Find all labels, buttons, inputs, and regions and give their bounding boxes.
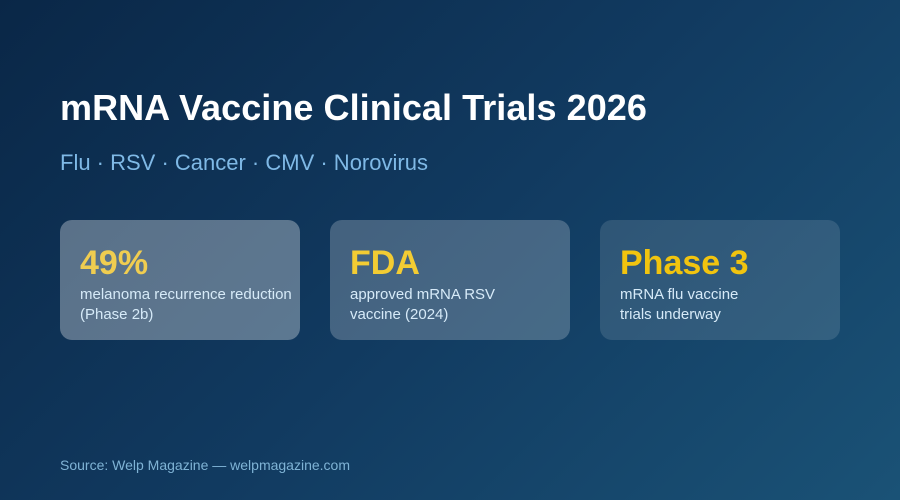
description: flu vaccine: mRNA flu vaccine: [620, 286, 738, 303]
source footer: Source: Welp Magazine — welpmagazine.com: [60, 457, 350, 473]
description: RSV vaccine: [350, 286, 495, 323]
stat: Phase 3: Phase 3: [620, 244, 749, 282]
description: RSV vaccine: vaccine (2024): [350, 306, 448, 323]
stat: FDA: FDA: [350, 244, 420, 282]
description: flu vaccine: [620, 286, 738, 323]
panel: FDA stat card: [330, 220, 570, 340]
stat: 49%: 49%: [80, 244, 148, 282]
description: flu vaccine: trials underway: [620, 306, 721, 323]
title: mRNA Vaccine Clinical Trials 2026: [60, 87, 647, 128]
description: RSV vaccine: approved mRNA RSV: [350, 286, 495, 303]
subtitle: Flu · RSV · Cancer · CMV · Norovirus: [60, 150, 428, 175]
description: melanoma: [80, 286, 292, 323]
description: melanoma: (Phase 2b): [80, 306, 153, 323]
panel: Phase 3 stat card: [600, 220, 840, 340]
description: melanoma: melanoma recurrence reduction: [80, 286, 292, 303]
panel: melanoma stat card: [60, 220, 300, 340]
